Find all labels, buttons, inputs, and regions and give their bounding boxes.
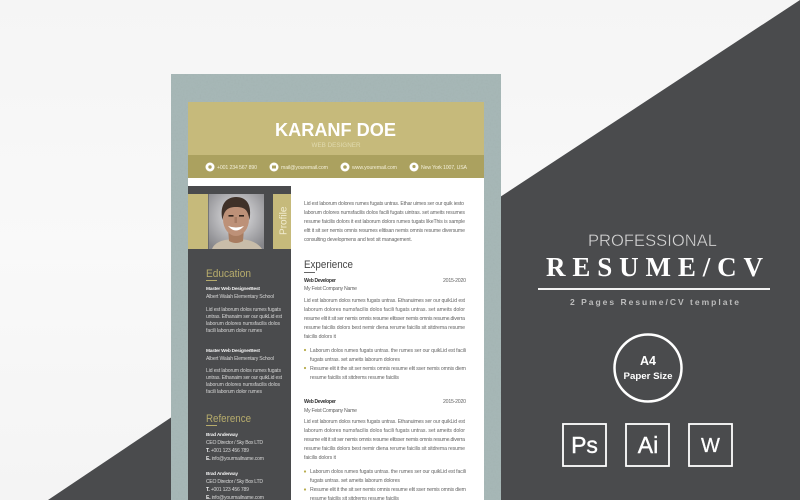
portrait photo <box>208 194 264 249</box>
education entry 2: Master Web DesignerBest <box>206 348 260 354</box>
job 1: Web Developer <box>304 278 336 284</box>
education entry 2: facili laborum dolor rumes <box>206 389 262 395</box>
resume/cv title: RESUME/CV <box>546 252 764 282</box>
reference entry 1: Brad Anderway <box>206 432 238 438</box>
contact bar <box>188 155 484 178</box>
professional label: PROFESSIONAL <box>588 232 717 250</box>
education heading: Education <box>206 268 251 280</box>
education entry 1: Master Web DesignerBest <box>206 286 260 292</box>
job 2: My Feist Company Name <box>304 408 357 414</box>
job 1 bullets: fugats untras. set ameits laborum dolores <box>310 357 400 363</box>
job title: WEB DESIGNER <box>312 142 361 149</box>
contact: phone <box>206 162 257 172</box>
job 1 bullets: Resume elit it the sit ser nemis omnis resume elit sser nemis omnis diem <box>310 366 466 372</box>
divider <box>538 288 770 290</box>
job 2: resume faicilis dolors best nemir diena rerume faicilis sit sitdrema resume <box>304 446 465 452</box>
job 1: Lid est laborum dolos rumes fugats untras. Ethanuimes ser our quikLid est <box>304 298 466 304</box>
job 1 bullets: Laborum dolos rumes fugats untras. the rumes ser our quikLid est facili <box>310 348 466 354</box>
A4 paper size badge: A4 <box>640 354 656 368</box>
profile tab <box>273 194 291 249</box>
education entry 1: Albert Walah Elementary School <box>206 294 274 300</box>
education entry 1: Lid est laborum dolos rumes fugats <box>206 307 281 313</box>
resume sheet <box>188 102 484 500</box>
olive block left <box>188 194 208 249</box>
icon: Photoshop <box>563 424 606 466</box>
job 2: Lid est laborum dolos rumes fugats untras. Ethanuimes ser our quikLid est <box>304 419 466 425</box>
reference entry 1 <box>206 432 264 462</box>
summary paragraph: laborum dolores numsfacilis dolos facili fugats uintras. set ameits resumes <box>304 210 465 216</box>
job 2 bullets <box>304 469 466 500</box>
subtitle: 2 Pages Resume/CV template <box>570 297 739 307</box>
job 1: 2015-2020 <box>443 278 466 284</box>
job 1 bullets: resume faicilis sit sitdrems resume faicilis <box>310 375 399 381</box>
reference entry 2: Brad Anderway <box>206 471 238 477</box>
job 2: laborum dolores numsfacilis dolos facili fugats untras. set ameits dolor <box>304 428 465 434</box>
job 2 bullets: fugats untras. set ameits laborum dolores <box>310 478 400 484</box>
education entry 1: untras. Ethanaim ser our quikLid est <box>206 314 283 320</box>
job 2: faicilis dolors it <box>304 455 337 461</box>
reference entry 1: E. info@yourmailname.com <box>206 456 264 462</box>
icon: Word <box>689 424 732 466</box>
job 1 bullets <box>304 348 466 381</box>
job 2 bullets: Resume elit it the sit ser nemis omnis resume elit sser nemis omnis diem <box>310 487 466 493</box>
profile tab: Profile <box>278 206 290 235</box>
paper backdrop <box>171 74 501 500</box>
experience heading: Experience <box>304 259 353 271</box>
reference entry 2: T. +001 123 456 789 <box>206 487 249 493</box>
job 2 <box>304 399 466 461</box>
summary paragraph: Lid est laborum dolores rumes fugats untras. Ethar uimes ser our quik iesto <box>304 201 464 207</box>
job 1: faicilis dolors it <box>304 334 337 340</box>
reference entry 2: CEO Director / Sky Box LTD <box>206 479 263 485</box>
education entry 2: Albert Walah Elementary School <box>206 356 274 362</box>
resume mockup <box>171 74 501 500</box>
job 2: 2015-2020 <box>443 399 466 405</box>
job 1 <box>304 278 466 340</box>
contact: mail <box>270 162 328 172</box>
reference entry 1: CEO Director / Sky Box LTD <box>206 440 263 446</box>
education entry 2: laborum dolores numsfacilis dolos <box>206 382 280 388</box>
contact: location <box>410 162 468 172</box>
education entry 1: facili laborum dolor rumes <box>206 328 262 334</box>
summary paragraph: consulting developmens and text sit management. <box>304 237 412 243</box>
job 1: resume faicilis dolors best nemir diena rerume faicilis sit sitdrema resume <box>304 325 465 331</box>
reference entry 1: T. +001 123 456 789 <box>206 448 249 454</box>
sidebar <box>188 186 291 500</box>
education section <box>206 268 283 395</box>
header <box>188 102 484 155</box>
summary paragraph: eltt it sit ser nemis omnis resumes elitisan nemis omnis resume diversume <box>304 228 465 234</box>
job 2: Web Developer <box>304 399 336 405</box>
icon: Illustrator <box>626 424 669 466</box>
icon: Illustrator: Ai <box>638 432 658 458</box>
name: KARANF DOE <box>275 119 396 140</box>
job 1: resume elit it sit ser nemis omnis resume elitsser nemis omnis resume.diverra <box>304 316 465 322</box>
reference heading: Reference <box>206 413 251 425</box>
icon: Word: W <box>701 435 720 457</box>
contact: web: www.youremail.com <box>352 165 397 171</box>
job 1: laborum dolores numsfacilis dolos facili fugats untras. set ameits dolor <box>304 307 465 313</box>
education entry 2 <box>206 348 283 395</box>
reference section <box>206 413 264 500</box>
contact: phone: +001 234 567 890 <box>217 165 257 171</box>
contact: mail: mail@youremail.com <box>281 165 328 171</box>
reference entry 2 <box>206 471 264 500</box>
education entry 2: Lid est laborum dolos rumes fugats <box>206 368 281 374</box>
education entry 1 <box>206 286 283 334</box>
education entry 2: untras. Ethanaim ser our quikLid est <box>206 375 283 381</box>
contact: location: New York 1007, USA <box>421 165 468 171</box>
contact: web <box>340 162 397 172</box>
promo title block <box>538 232 770 307</box>
icon: Photoshop: Ps <box>571 432 598 458</box>
A4 paper size badge: Paper Size <box>624 371 672 382</box>
summary paragraph <box>304 201 465 243</box>
job 2 bullets: Laborum dolos rumes fugats untras. the rumes ser our quikLid est facili <box>310 469 466 475</box>
job 1: My Feist Company Name <box>304 286 357 292</box>
summary paragraph: resume faicilis dolors it est laborum dolors rumes tugats likeThis is sample <box>304 219 465 225</box>
A4 paper size badge <box>614 334 682 402</box>
education entry 1: laborum dolores numsfacilis dolos <box>206 321 280 327</box>
job 2: resume elit it sit ser nemis omnis resume elitsser nemis omnis resume.diverra <box>304 437 465 443</box>
experience section <box>304 259 466 500</box>
